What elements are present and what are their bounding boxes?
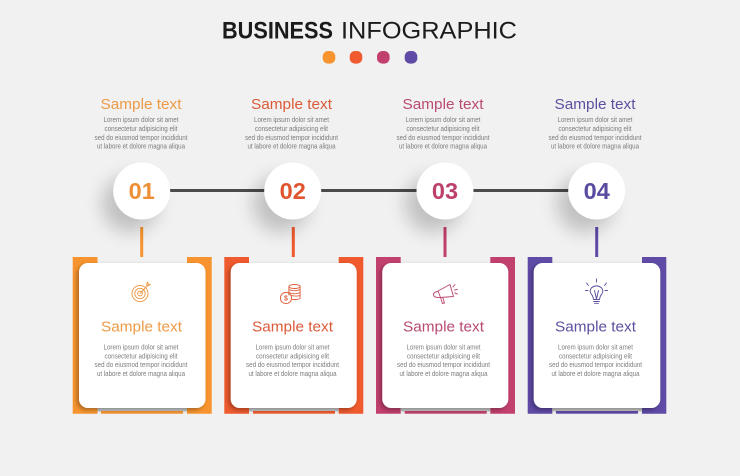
top text: step 4: Lorem ipsum dolor sit amet xyxy=(558,115,632,124)
card 1 body: Lorem ipsum dolor sit amet xyxy=(104,342,178,352)
number badge 04 xyxy=(557,162,625,232)
card 4 body: Lorem ipsum dolor sit amet xyxy=(558,342,633,352)
number badge 01 xyxy=(102,162,170,232)
panel: card 1 xyxy=(73,257,212,414)
top text: step 4: sed do eiusmod tempor incididunt xyxy=(548,133,642,142)
top text: step 3: ut labore et dolore magna aliqua xyxy=(399,142,488,150)
top text: step 2: sed do eiusmod tempor incididunt xyxy=(245,133,338,142)
number badge 03 xyxy=(405,162,474,232)
top text: step 1: Sample text xyxy=(100,96,182,113)
card 4 heading: Sample text xyxy=(555,318,637,336)
top text: step 4: ut labore et dolore magna aliqua xyxy=(551,142,640,150)
number badge 03: 03 xyxy=(432,178,458,204)
card 1 body: sed do eiusmod tempor incididunt xyxy=(94,360,188,369)
card 2 body: consectetur adipisicing elit xyxy=(256,352,329,360)
title xyxy=(222,18,517,44)
card 4 body: ut labore et dolore magna aliqua xyxy=(552,369,640,378)
top text: step 4 xyxy=(548,96,642,150)
card 3 body: ut labore et dolore magna aliqua xyxy=(400,369,488,378)
card 1 body: ut labore et dolore magna aliqua xyxy=(97,369,186,378)
number badge 04: 04 xyxy=(584,178,610,204)
number badge 01: 01 xyxy=(129,178,155,204)
card 3 body xyxy=(397,342,490,378)
card 4 body: sed do eiusmod tempor incididunt xyxy=(549,360,642,369)
top text: step 1: Lorem ipsum dolor sit amet xyxy=(104,115,178,124)
card 3 body: Lorem ipsum dolor sit amet xyxy=(406,342,480,352)
number badge 02 xyxy=(253,162,321,232)
card 4 body xyxy=(549,342,642,378)
icon: megaphone xyxy=(433,284,458,304)
top text: step 2 xyxy=(245,96,338,150)
top text: step 3 xyxy=(396,96,490,150)
panel: card 4 xyxy=(528,257,666,414)
top text: step 4: consectetur adipisicing elit xyxy=(558,124,632,133)
top text: step 1: consectetur adipisicing elit xyxy=(104,124,178,133)
panel: card 3 xyxy=(376,257,515,414)
icon: coins xyxy=(280,284,300,304)
top text: step 2: consectetur adipisicing elit xyxy=(255,124,328,133)
icon: target xyxy=(132,282,150,302)
top text: step 2: Lorem ipsum dolor sit amet xyxy=(254,115,329,124)
top text: step 3: sed do eiusmod tempor incididunt xyxy=(396,133,490,142)
number badge 02: 02 xyxy=(280,178,306,204)
legend dots xyxy=(323,51,417,64)
card 2 body: ut labore et dolore magna aliqua xyxy=(248,369,337,378)
timeline line xyxy=(170,189,570,192)
top text: step 1 xyxy=(94,96,188,150)
connector 2 xyxy=(292,227,295,257)
connector 1 xyxy=(140,227,143,257)
top text: step 3: Sample text xyxy=(402,96,484,113)
card 3 heading: Sample text xyxy=(403,318,485,336)
card 3 body: consectetur adipisicing elit xyxy=(407,352,480,360)
card 2 body xyxy=(246,342,339,378)
icon: coins: $ xyxy=(284,296,288,303)
card 1 heading: Sample text xyxy=(101,318,183,336)
top text: step 3: consectetur adipisicing elit xyxy=(406,124,480,133)
top text: step 4: Sample text xyxy=(554,96,636,113)
card 3 body: sed do eiusmod tempor incididunt xyxy=(397,360,490,369)
top text: step 3: Lorem ipsum dolor sit amet xyxy=(406,115,480,124)
top text: step 2: Sample text xyxy=(251,96,333,113)
panel: card 2 xyxy=(224,257,363,414)
connector 4 xyxy=(595,227,598,257)
card 2 body: sed do eiusmod tempor incididunt xyxy=(246,360,339,369)
card 4 body: consectetur adipisicing elit xyxy=(559,352,632,360)
top text: step 2: ut labore et dolore magna aliqua xyxy=(248,142,336,150)
icon: light bulb xyxy=(586,279,608,303)
title: BUSINESS xyxy=(222,18,333,44)
card 2 heading: Sample text xyxy=(252,318,334,336)
connector 3 xyxy=(444,227,446,257)
top text: step 1: ut labore et dolore magna aliqua xyxy=(97,142,186,150)
card 1 body: consectetur adipisicing elit xyxy=(104,352,178,360)
card 2 body: Lorem ipsum dolor sit amet xyxy=(256,342,330,352)
card 1 body xyxy=(94,342,188,378)
title: INFOGRAPHIC xyxy=(341,18,517,44)
top text: step 1: sed do eiusmod tempor incididunt xyxy=(94,133,188,142)
